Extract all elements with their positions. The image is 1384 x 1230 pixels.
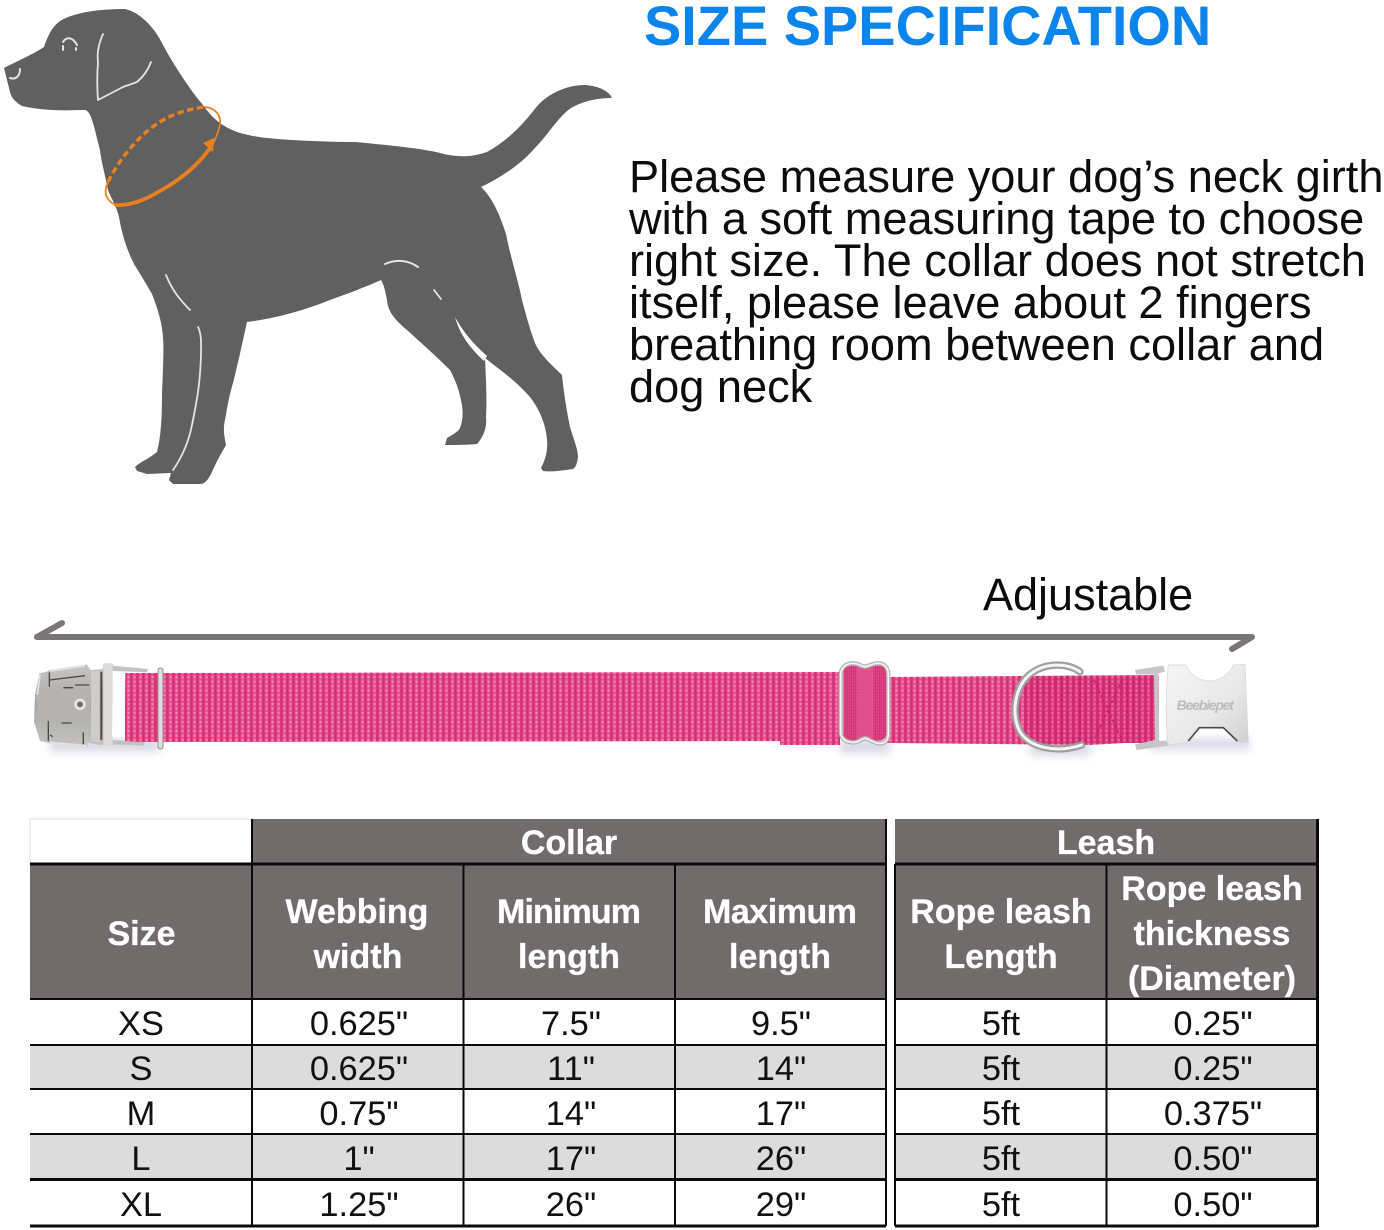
group header: Collar: Collar xyxy=(521,824,617,862)
row XS xyxy=(118,1005,1253,1043)
row S: 0.625" xyxy=(310,1050,408,1088)
row S: 11" xyxy=(547,1050,595,1088)
row XL xyxy=(120,1186,1253,1224)
row XL: 1.25" xyxy=(319,1186,399,1224)
column header: Rope leash thickness (Diameter): thickness xyxy=(1134,915,1290,953)
row L: 5ft xyxy=(982,1140,1021,1178)
row XS: 5ft xyxy=(982,1005,1021,1043)
row S xyxy=(130,1050,1253,1088)
size table xyxy=(30,819,1318,1227)
measuring instructions text block: Please measure your dog’s neck girth xyxy=(629,151,1383,202)
row M: 5ft xyxy=(982,1095,1021,1133)
row L: 0.50" xyxy=(1173,1140,1253,1178)
illustration: dog silhouette with neck measuring loop xyxy=(4,9,612,484)
measuring instructions text block: dog neck xyxy=(629,361,813,412)
row XL: 0.50" xyxy=(1173,1186,1253,1224)
row S: 0.25" xyxy=(1173,1050,1253,1088)
column header: Maximum length: Maximum xyxy=(703,893,857,931)
row M: 14" xyxy=(546,1095,596,1133)
row XS: 9.5" xyxy=(751,1005,811,1043)
group header: Leash: Leash xyxy=(1057,824,1155,862)
table header fills xyxy=(30,819,1317,999)
row M: 0.75" xyxy=(319,1095,399,1133)
row XS: 7.5" xyxy=(541,1005,601,1043)
row XS: XS xyxy=(118,1005,164,1043)
grid lines xyxy=(30,819,1318,1227)
row XL: XL xyxy=(120,1186,162,1224)
column header: Rope leash Length: Length xyxy=(944,938,1058,976)
row XS: 0.25" xyxy=(1173,1005,1253,1043)
row L: 17" xyxy=(546,1140,596,1178)
row S: S xyxy=(130,1050,152,1088)
row L: 1" xyxy=(343,1140,375,1178)
column header: Webbing width xyxy=(286,893,428,976)
column header: Rope leash thickness (Diameter): Rope leash xyxy=(1121,870,1303,908)
gap between hind legs xyxy=(455,317,487,361)
adjustable label: Adjustable xyxy=(983,569,1193,620)
top-left blank header cell xyxy=(30,819,252,864)
row M: 17" xyxy=(756,1095,806,1133)
adjustable length arrow xyxy=(37,623,1252,649)
column header: Size: Size xyxy=(107,915,176,953)
row XL: 29" xyxy=(756,1186,806,1224)
slider strap section xyxy=(843,666,886,741)
row L: L xyxy=(131,1140,151,1178)
measuring instructions text block: right size. The collar does not stretch xyxy=(629,235,1366,286)
measuring instructions text block: itself, please leave about 2 fingers xyxy=(629,277,1312,328)
measuring instructions text block: breathing room between collar and xyxy=(629,319,1324,370)
dog body xyxy=(4,9,612,484)
measuring loop xyxy=(106,107,220,205)
d-ring xyxy=(1015,665,1082,749)
webbing strap xyxy=(125,672,840,745)
row L: 26" xyxy=(756,1140,806,1178)
column header: Rope leash thickness (Diameter): (Diameter) xyxy=(1128,960,1296,998)
column header: Minimum length: Minimum xyxy=(497,893,641,931)
row L xyxy=(131,1140,1253,1178)
column header: Rope leash Length: Rope leash xyxy=(910,893,1092,931)
striped rows xyxy=(30,1045,1317,1179)
collar photo xyxy=(34,663,1250,756)
row XS: 0.625" xyxy=(310,1005,408,1043)
column header: Webbing width: Webbing xyxy=(286,893,428,931)
keeper bar xyxy=(158,668,163,749)
measuring instructions text block xyxy=(628,151,1383,412)
row XL: 5ft xyxy=(982,1186,1021,1224)
column header: Maximum length: length xyxy=(729,938,831,976)
brand mark: Beebiepet xyxy=(1177,697,1235,713)
column header: Minimum length xyxy=(497,893,641,976)
row M: M xyxy=(127,1095,155,1133)
collar shadows xyxy=(50,738,1250,756)
slider loop xyxy=(841,663,888,743)
left metal buckle xyxy=(34,663,148,747)
row M: 0.375" xyxy=(1164,1095,1262,1133)
column header: Minimum length: length xyxy=(518,938,620,976)
right metal buckle xyxy=(1135,664,1248,750)
row S: 5ft xyxy=(982,1050,1021,1088)
column header: Rope leash thickness (Diameter) xyxy=(1121,870,1303,998)
row XL: 26" xyxy=(546,1186,596,1224)
stitched fold xyxy=(1024,676,1158,744)
row S: 14" xyxy=(756,1050,806,1088)
column header: Rope leash Length xyxy=(910,893,1092,976)
measuring instructions text block: with a soft measuring tape to choose xyxy=(628,193,1364,244)
dog detail lines xyxy=(10,34,441,470)
row M xyxy=(127,1095,1262,1133)
column header: Webbing width: width xyxy=(313,938,402,976)
column header: Maximum length xyxy=(703,893,857,976)
